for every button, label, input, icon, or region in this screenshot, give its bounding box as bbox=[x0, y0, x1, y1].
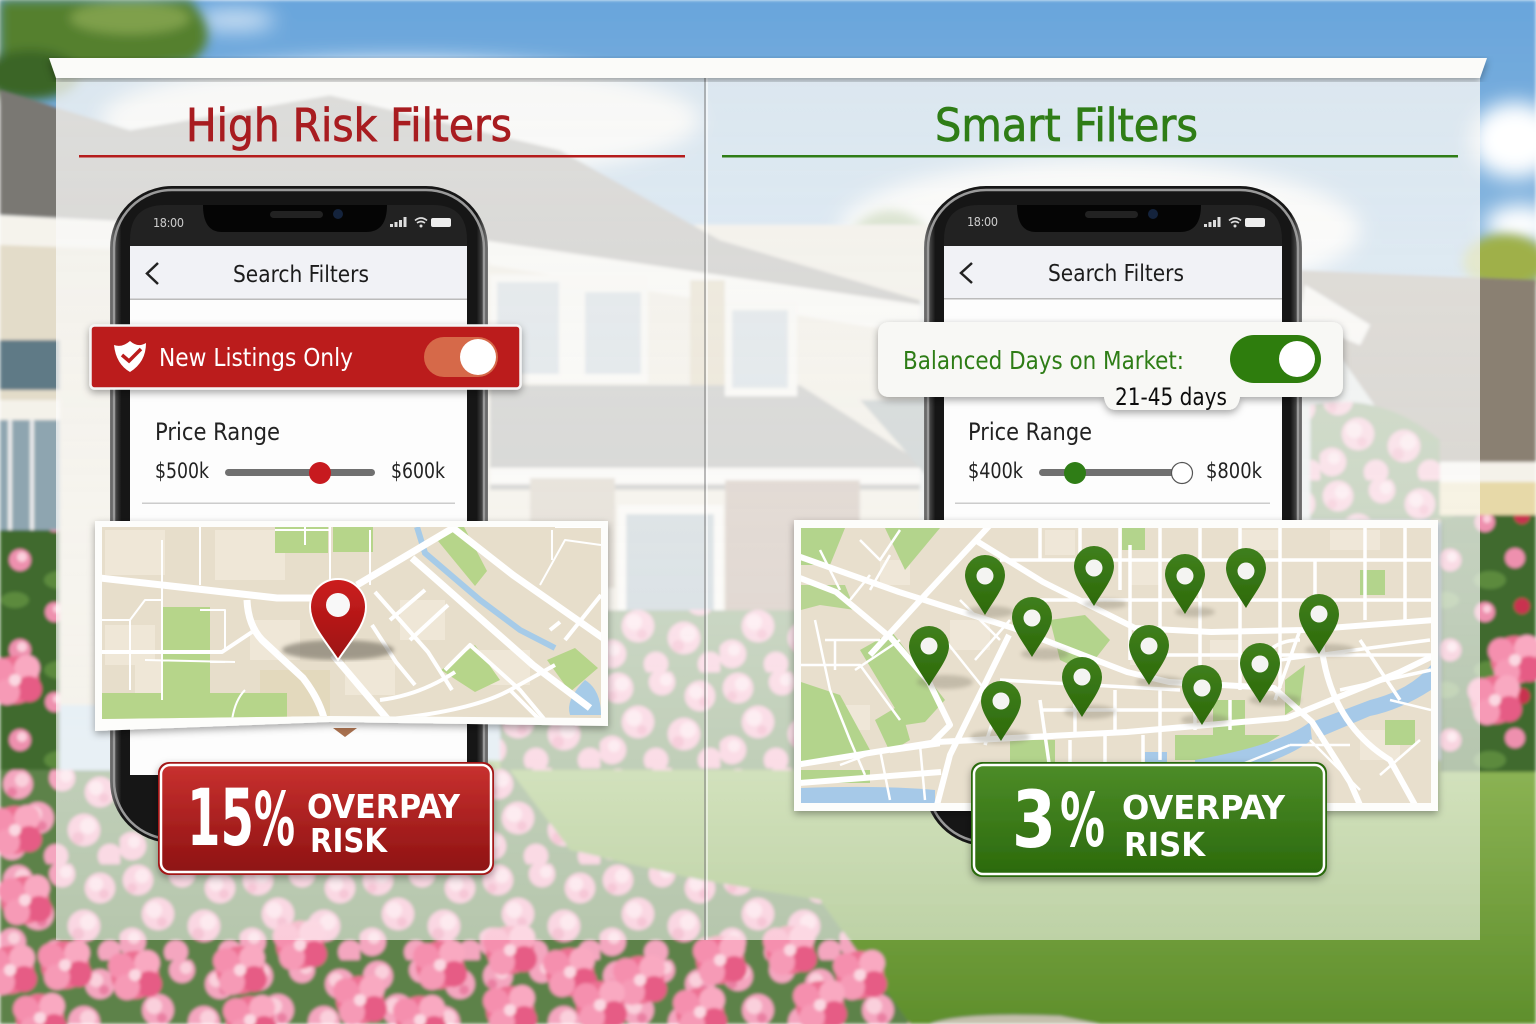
phone: left bbox=[110, 186, 488, 843]
back chevron bbox=[961, 263, 972, 283]
river bbox=[417, 527, 555, 648]
screen status bar bbox=[130, 205, 467, 246]
slider track bbox=[225, 469, 375, 476]
price max: $600k bbox=[391, 459, 445, 483]
heading: High Risk Filters: High Risk Filters bbox=[186, 99, 512, 152]
slider knob max bbox=[1172, 462, 1192, 484]
center divider bbox=[704, 78, 708, 940]
map: left bbox=[95, 521, 608, 731]
frosted panel bbox=[56, 78, 1480, 940]
banner text: New Listings Only bbox=[159, 343, 353, 372]
primary roads bbox=[795, 525, 1435, 805]
filter banner: New Listings Only bbox=[90, 326, 520, 388]
minor roads bbox=[984, 528, 1431, 762]
map shadow bbox=[282, 640, 394, 660]
toggle bbox=[1230, 335, 1321, 383]
label: OVERPAY bbox=[1122, 788, 1286, 827]
slider knob bbox=[309, 462, 331, 484]
label: OVERPAY bbox=[307, 787, 461, 826]
green parks bbox=[801, 528, 1415, 783]
top rail bbox=[49, 58, 1487, 78]
price range label: Price Range bbox=[155, 418, 280, 446]
price min: $500k bbox=[155, 459, 209, 483]
pin shadows bbox=[917, 599, 1355, 744]
percent value: % bbox=[254, 777, 295, 863]
percent value: 3 bbox=[1012, 776, 1056, 866]
phone body bbox=[924, 186, 1302, 846]
screen status bar bbox=[944, 205, 1282, 246]
notch bbox=[203, 205, 387, 232]
notch bbox=[1017, 205, 1201, 232]
icon: shield check bbox=[114, 341, 146, 372]
primary roads bbox=[100, 528, 603, 722]
screen title: Search Filters bbox=[1048, 261, 1184, 287]
map: right bbox=[794, 520, 1438, 811]
phone: right bbox=[924, 186, 1302, 846]
app header bbox=[944, 246, 1282, 299]
map pin bbox=[310, 579, 366, 660]
water bbox=[801, 665, 1431, 803]
map content bbox=[795, 525, 1435, 805]
label line 2: RISK bbox=[1124, 825, 1206, 864]
status time: 18:00 bbox=[153, 215, 184, 230]
listing pins bbox=[909, 546, 1339, 741]
price range label: Price Range bbox=[968, 418, 1092, 446]
status icons bbox=[1204, 217, 1265, 228]
screen title: Search Filters bbox=[233, 262, 369, 288]
tertiary roads bbox=[801, 530, 1431, 803]
screen bbox=[130, 246, 467, 775]
days value: 21-45 days bbox=[1115, 383, 1227, 411]
slider track bbox=[1039, 469, 1184, 476]
filter card: Balanced Days on Market bbox=[878, 322, 1343, 411]
screen bbox=[944, 246, 1282, 546]
marker tip below map bbox=[333, 728, 357, 737]
risk badge: 15% bbox=[158, 762, 494, 875]
percent value bbox=[1012, 776, 1105, 866]
phone body bbox=[110, 186, 488, 843]
price min: $400k bbox=[968, 459, 1023, 483]
status icons bbox=[390, 217, 451, 228]
back chevron bbox=[147, 263, 158, 284]
slider knob min bbox=[1064, 462, 1086, 484]
percent value: 15 bbox=[187, 774, 254, 864]
pin centers bbox=[920, 560, 1328, 710]
heading: Smart Filters: Smart Filters bbox=[935, 99, 1198, 152]
price max: $800k bbox=[1206, 459, 1262, 483]
map content bbox=[100, 523, 603, 722]
toggle bbox=[424, 337, 498, 377]
status time: 18:00 bbox=[967, 214, 998, 229]
app header bbox=[130, 246, 467, 299]
percent value: % bbox=[1060, 778, 1105, 864]
label line 2: RISK bbox=[310, 821, 388, 860]
risk badge: 3% bbox=[971, 762, 1327, 877]
card text: Balanced Days on Market: bbox=[903, 346, 1184, 375]
